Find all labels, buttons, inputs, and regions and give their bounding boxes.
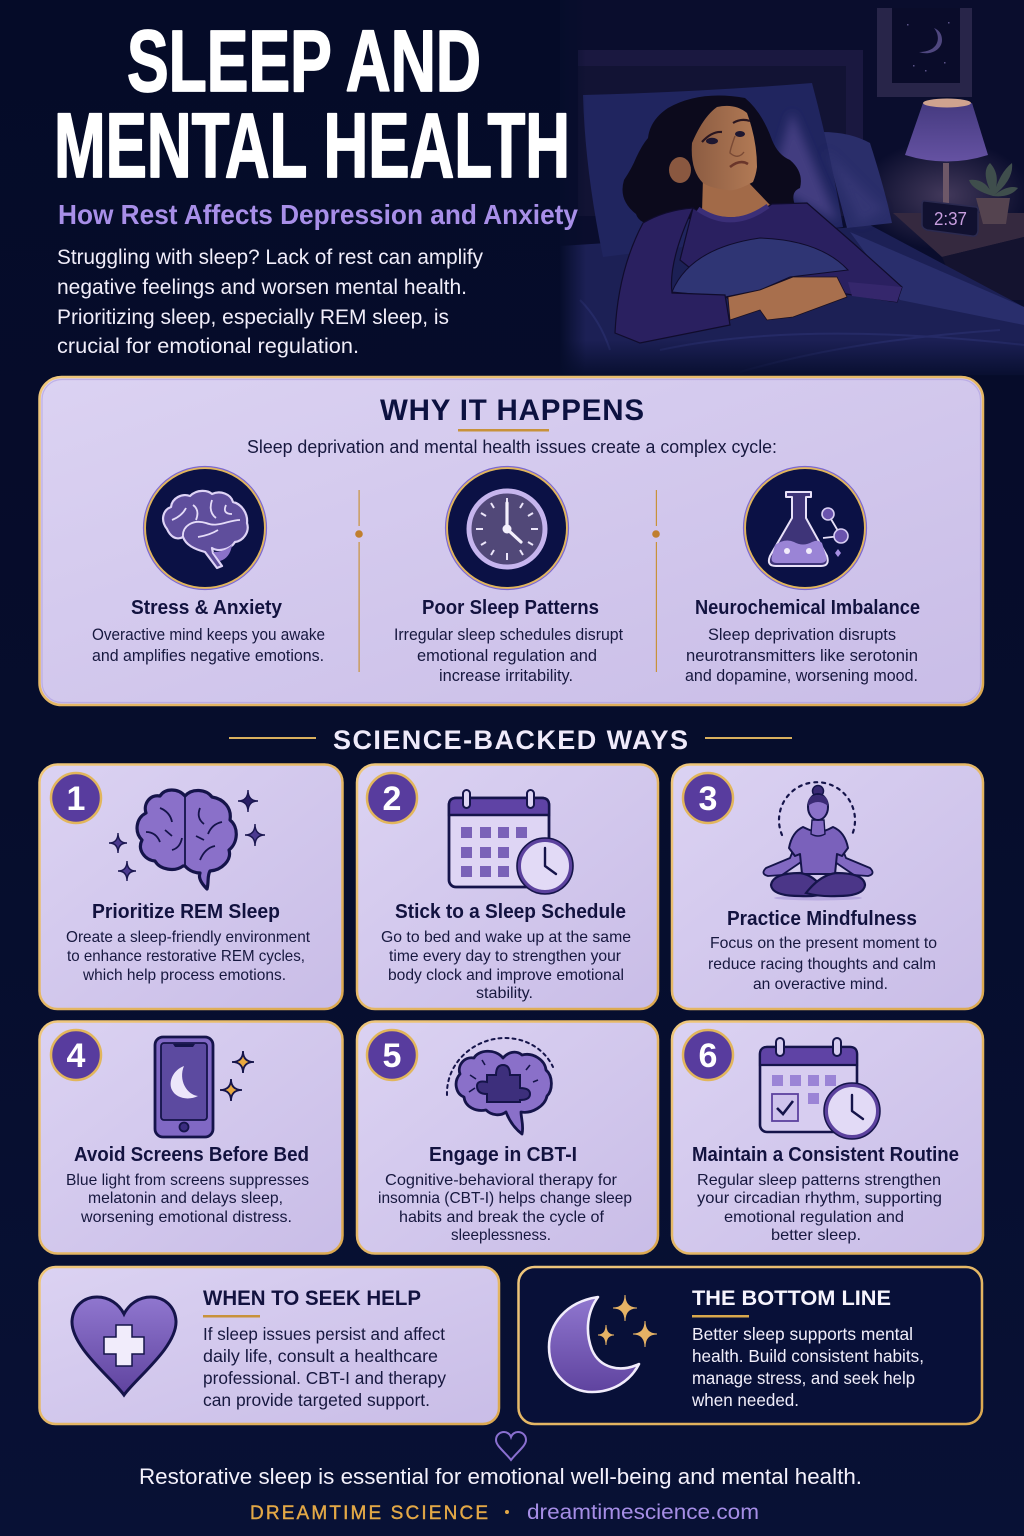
text: reduce racing thoughts and calm — [708, 956, 936, 973]
card 1: prioritize REM sleep — [40, 764, 342, 1009]
text: Avoid Screens Before Bed — [74, 1143, 309, 1166]
text: daily life, consult a healthcare — [203, 1346, 438, 1366]
text — [203, 1287, 446, 1410]
divider 1 — [355, 490, 363, 672]
text: Blue light from screens suppresses — [66, 1172, 309, 1189]
text: WHEN TO SEEK HELP — [203, 1287, 421, 1310]
icon: calendar and clock — [449, 790, 573, 894]
text: better sleep. — [771, 1227, 861, 1244]
text: neurochemical imbalance: neurotransmitters like serotonin — [686, 647, 918, 665]
card 2: stick to a sleep schedule — [357, 764, 658, 1009]
number badge — [51, 1030, 101, 1080]
text: which help process emotions. — [82, 967, 286, 984]
number badge — [367, 1030, 417, 1080]
intro paragraph: Struggling with sleep? Lack of rest can amplify — [57, 245, 483, 269]
text: Go to bed and wake up at the same — [381, 929, 631, 946]
text — [378, 1143, 632, 1244]
text: professional. CBT-I and therapy — [203, 1368, 446, 1388]
text: poor sleep patterns: emotional regulation and — [417, 647, 597, 665]
intro paragraph: crucial for emotional regulation. — [57, 334, 359, 358]
text: when needed. — [691, 1390, 799, 1410]
text: to enhance restorative REM cycles, — [67, 948, 305, 965]
footer brand: dreamtimescience.com — [527, 1501, 759, 1524]
text: health. Build consistent habits, — [692, 1346, 924, 1366]
card 5: engage in CBT-I — [357, 1022, 658, 1254]
text: Cognitive-behavioral therapy for — [385, 1172, 618, 1189]
text: an overactive mind. — [753, 976, 888, 993]
text: Practice Mindfulness — [727, 907, 917, 930]
number badge — [683, 1030, 733, 1080]
section heading: science-backed ways: SCIENCE-BACKED WAYS — [333, 725, 688, 755]
text: emotional regulation and — [724, 1209, 904, 1226]
text: THE BOTTOM LINE — [692, 1287, 891, 1310]
panel: the bottom line — [518, 1267, 982, 1424]
closing statement: Restorative sleep is essential for emotional well-being and mental health. — [139, 1464, 862, 1489]
number badge: 3 — [699, 780, 717, 818]
lead-in: Sleep deprivation and mental health issues create a complex cycle: — [247, 437, 777, 457]
duvet — [560, 225, 1024, 375]
text: poor sleep patterns: Poor Sleep Patterns — [422, 596, 599, 619]
intro paragraph — [57, 245, 483, 358]
icon: calendar with check and clock — [760, 1038, 880, 1139]
intro paragraph: Prioritizing sleep, especially REM sleep, is — [57, 305, 449, 329]
number badge — [367, 773, 417, 823]
title: MENTAL HEALTH — [54, 95, 570, 197]
text — [381, 900, 631, 1002]
text: stress and anxiety: Overactive mind keeps you awake — [92, 626, 325, 644]
heading: WHY IT HAPPENS — [380, 394, 644, 427]
text: insomnia (CBT-I) helps change sleep — [378, 1190, 632, 1207]
text: Regular sleep patterns strengthen — [697, 1172, 941, 1189]
text: body clock and improve emotional — [388, 967, 624, 984]
text: stress and anxiety: Stress & Anxiety — [131, 596, 283, 619]
plant — [969, 163, 1018, 224]
text: If sleep issues persist and affect — [203, 1324, 445, 1344]
number badge: 5 — [383, 1037, 401, 1075]
left sleeve — [615, 208, 730, 343]
text: Engage in CBT-I — [429, 1143, 577, 1166]
blanket over torso — [672, 238, 848, 297]
text — [66, 1143, 309, 1226]
number badge: 6 — [699, 1037, 717, 1075]
text: sleeplessness. — [451, 1227, 551, 1244]
framed night picture — [877, 8, 972, 97]
icon: brain with puzzle piece — [447, 1038, 553, 1134]
face — [669, 106, 757, 190]
panel: when to seek help — [40, 1267, 499, 1424]
icon: brain — [144, 466, 266, 590]
divider 2 — [652, 490, 660, 672]
fade — [560, 340, 1024, 376]
text: Better sleep supports mental — [692, 1324, 913, 1344]
text: poor sleep patterns — [394, 596, 623, 685]
icon: small heart — [496, 1432, 526, 1460]
lamp glow — [860, 140, 1024, 250]
card 6: maintain a consistent routine — [672, 1022, 983, 1254]
text: your circadian rhythm, supporting — [697, 1190, 942, 1207]
text: neurochemical imbalance: Sleep deprivation disrupts — [708, 626, 896, 644]
footer brand — [250, 1501, 759, 1524]
hair — [622, 96, 801, 224]
text: stability. — [476, 985, 533, 1002]
text: worsening emotional distress. — [80, 1209, 292, 1226]
panel: why it happens — [40, 377, 983, 705]
title — [54, 13, 570, 197]
text: poor sleep patterns: Irregular sleep schedules disrupt — [394, 626, 623, 644]
text: melatonin and delays sleep, — [88, 1190, 283, 1207]
text: Prioritize REM Sleep — [92, 900, 280, 923]
text: Stick to a Sleep Schedule — [395, 900, 626, 923]
intro paragraph: negative feelings and worsen mental health. — [57, 275, 467, 299]
number badge: 4 — [67, 1037, 86, 1075]
icon: phone with moon — [155, 1037, 254, 1137]
nightstand — [893, 213, 1024, 300]
number badge: 2 — [383, 780, 401, 818]
footer brand: DREAMTIME SCIENCE — [250, 1503, 488, 1524]
text: Maintain a Consistent Routine — [692, 1143, 959, 1166]
icon: clock — [446, 466, 568, 590]
text: poor sleep patterns: increase irritability. — [439, 667, 573, 685]
title: SLEEP AND — [127, 13, 481, 110]
icon: brain with sparkles — [109, 790, 265, 889]
number badge — [683, 773, 733, 823]
number badge: 1 — [67, 780, 85, 818]
text: stress and anxiety — [92, 596, 325, 665]
text: neurochemical imbalance: Neurochemical Imbalance — [695, 596, 920, 619]
text — [708, 907, 937, 993]
illustration: woman awake in bed at night — [560, 0, 1024, 376]
digital clock 2:37 — [922, 201, 978, 236]
icon: heart with cross — [72, 1297, 176, 1395]
text: habits and break the cycle of — [399, 1209, 605, 1226]
card 3: practice mindfulness — [672, 764, 983, 1009]
icon: meditating person — [763, 782, 873, 900]
sweater torso — [680, 203, 902, 302]
text — [66, 900, 311, 984]
lamp — [905, 98, 988, 203]
text: neurochemical imbalance: and dopamine, worsening mood. — [685, 667, 918, 685]
text: Oreate a sleep-friendly environment — [66, 929, 311, 946]
text: manage stress, and seek help — [692, 1368, 915, 1388]
card 4: avoid screens before bed — [40, 1022, 342, 1254]
text — [691, 1287, 924, 1410]
text: can provide targeted support. — [203, 1390, 430, 1410]
number badge — [51, 773, 101, 823]
text: time every day to strengthen your — [389, 948, 622, 965]
digital clock 2:37: 2:37 — [934, 209, 967, 229]
text: stress and anxiety: and amplifies negative emotions. — [92, 647, 324, 665]
text: Focus on the present moment to — [710, 935, 937, 952]
hands — [728, 277, 847, 320]
icon: flask and molecule — [744, 466, 866, 590]
text — [692, 1143, 959, 1244]
headboard — [578, 50, 863, 216]
neck — [702, 178, 770, 217]
pillows — [583, 83, 892, 257]
subtitle: How Rest Affects Depression and Anxiety — [58, 199, 578, 230]
icon: crescent moon and stars — [549, 1295, 657, 1392]
text: neurochemical imbalance — [685, 596, 920, 685]
